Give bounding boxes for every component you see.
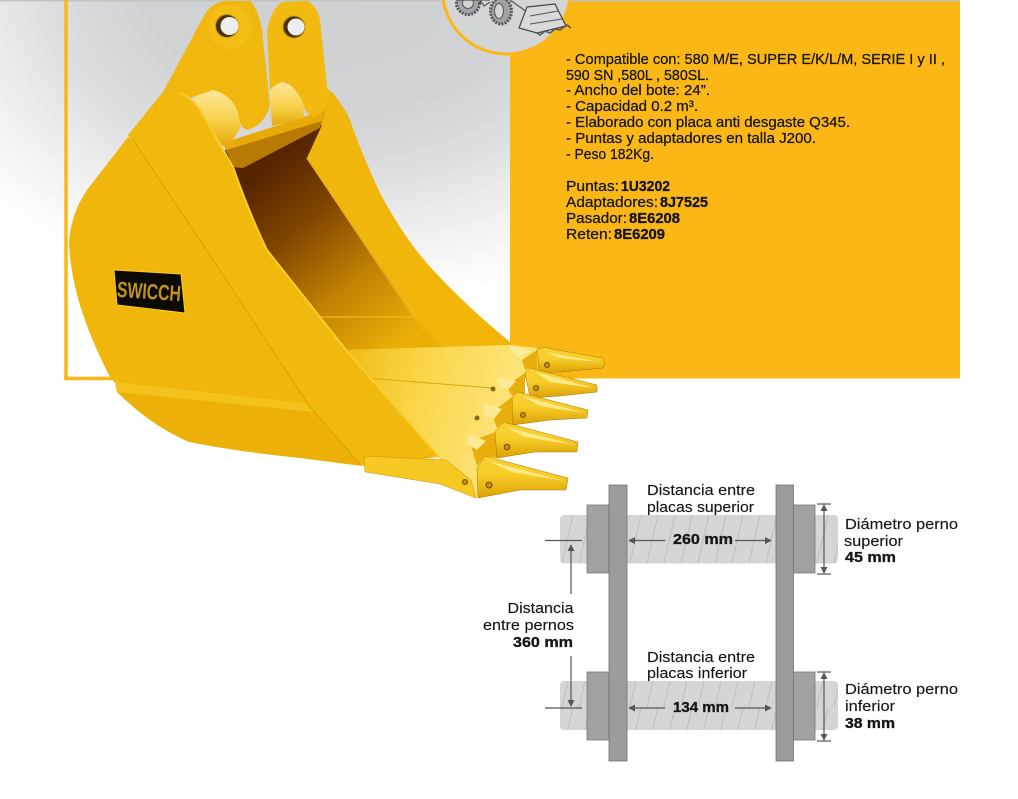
adapter lip highlights xyxy=(467,345,530,450)
part numbers text block: Adaptadores: xyxy=(566,194,658,211)
band crease xyxy=(133,140,360,464)
dimension diagram xyxy=(483,482,958,761)
label: upper pin diameter: Diámetro perno xyxy=(845,516,958,533)
label: upper plate distance: Distancia entre xyxy=(647,482,755,499)
floor seam xyxy=(367,378,492,388)
arrows: upper diameter xyxy=(817,504,831,574)
label: lower pin diameter: 38 mm xyxy=(845,715,895,732)
bucket interior xyxy=(225,125,447,352)
label: upper pin diameter: 45 mm xyxy=(845,549,896,566)
bosses xyxy=(587,505,815,740)
label: distance between pins: entre pernos xyxy=(483,617,574,634)
icon: wheel loader in circle xyxy=(442,0,571,54)
lower pin xyxy=(560,681,838,730)
specifications text block: - Capacidad 0.2 m³. xyxy=(566,98,698,115)
part numbers text block: 8E6208 xyxy=(629,210,680,227)
yellow information panel xyxy=(510,0,960,378)
specifications text block: - Peso 182Kg. xyxy=(566,146,654,163)
cross beam highlight xyxy=(223,110,325,150)
arrows: upper plate distance xyxy=(629,540,771,542)
tooth 5 xyxy=(477,456,568,498)
logo plate SWICCH: SWICCH xyxy=(116,277,182,306)
left ear bushing xyxy=(208,5,252,49)
floor bolts xyxy=(474,386,496,420)
left plate xyxy=(609,485,627,761)
left lifting ear xyxy=(163,1,270,130)
bucket photo illustration xyxy=(69,1,605,498)
specifications text block: 590 SN ,580L , 580SL. xyxy=(566,67,709,84)
tooth 2 xyxy=(525,368,597,398)
tooth 3 xyxy=(512,392,588,425)
cutting edge side plate xyxy=(364,456,476,498)
side wear strip xyxy=(115,382,314,412)
specifications text block: - Ancho del bote: 24”. xyxy=(566,82,710,99)
lower wear section xyxy=(115,383,362,466)
upper cross beam xyxy=(223,112,325,168)
bucket side plate xyxy=(69,137,310,407)
specifications text block: - Compatible con: 580 M/E, SUPER E/K/L/M, SERIE I y II , xyxy=(566,51,945,68)
label: lower plate distance: Distancia entre xyxy=(647,649,755,666)
label: upper plate distance: placas superior xyxy=(647,499,754,516)
label: upper plate distance: 260 mm xyxy=(673,531,733,548)
part numbers text block: 8J7525 xyxy=(660,194,708,211)
interior weld lines xyxy=(307,158,438,348)
logo plate SWICCH xyxy=(114,270,185,313)
left ear hole xyxy=(216,14,238,38)
label: lower plate distance: 134 mm xyxy=(673,699,729,716)
specifications text block: - Puntas y adaptadores en talla J200. xyxy=(566,130,816,147)
bucket floor and adapters xyxy=(339,345,538,498)
label: upper pin diameter xyxy=(844,516,958,566)
tooth 1 xyxy=(537,348,605,373)
band edge highlight xyxy=(180,93,439,457)
reinforcing band xyxy=(128,91,439,466)
arrows: lower plate distance xyxy=(629,707,771,709)
label: distance between pins: Distancia xyxy=(508,600,574,617)
part numbers text block: Puntas: xyxy=(566,178,619,195)
tooth 4 xyxy=(495,422,578,458)
right plate xyxy=(776,485,794,761)
specifications text block: - Elaborado con placa anti desgaste Q345. xyxy=(566,114,850,131)
label: lower pin diameter: Diámetro perno xyxy=(845,681,958,698)
pin sleeve right xyxy=(270,82,304,126)
arrows: distance between pins xyxy=(545,540,582,708)
upper pin xyxy=(560,515,838,564)
right lifting ear xyxy=(267,1,328,117)
bucket right wall xyxy=(307,88,515,352)
label: lower pin diameter xyxy=(845,681,958,732)
part numbers text block: Reten: xyxy=(566,226,612,243)
label: lower pin diameter: inferior xyxy=(845,698,895,715)
pin sleeve left xyxy=(193,90,241,146)
part numbers text block: 8E6209 xyxy=(614,226,665,243)
part numbers text block: Pasador: xyxy=(566,210,627,227)
label: distance between pins: 360 mm xyxy=(513,634,573,651)
label: upper plate distance xyxy=(647,482,755,548)
adapter side faces xyxy=(470,350,537,466)
yellow frame around bucket xyxy=(66,0,125,378)
specifications text block xyxy=(566,51,945,163)
right ear hole xyxy=(283,16,305,38)
part numbers text block xyxy=(566,178,708,243)
arrows: lower diameter xyxy=(817,672,831,741)
label: distance between pins xyxy=(483,600,574,651)
top grey strip xyxy=(0,0,960,2)
part numbers text block: 1U3202 xyxy=(621,178,670,195)
background grey gradient xyxy=(0,0,510,400)
label: upper pin diameter: superior xyxy=(844,533,903,550)
label: lower plate distance xyxy=(647,649,755,716)
label: lower plate distance: placas inferior xyxy=(647,665,747,682)
